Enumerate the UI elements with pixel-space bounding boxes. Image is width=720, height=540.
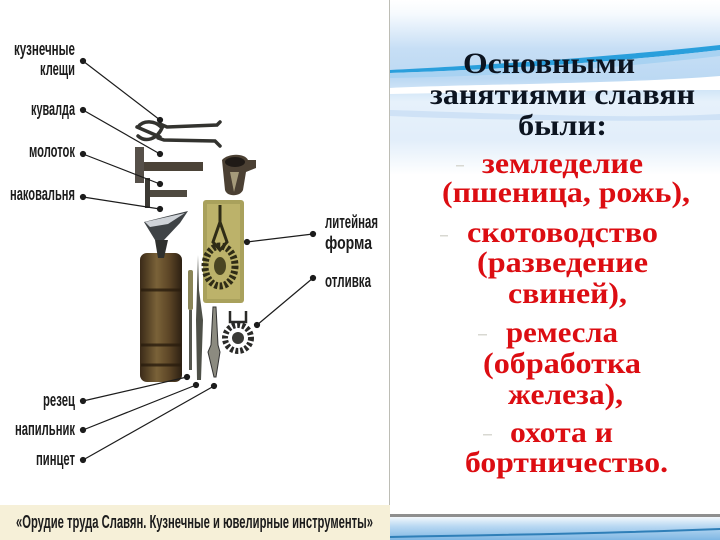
list of occupations: скотоводство [467,216,658,249]
tool labels: молоток [29,141,76,161]
panel: blue sky background [390,0,720,540]
icon: chisel [188,270,193,370]
list of occupations: железа), [508,378,623,411]
icon: sledgehammer [135,147,203,183]
list of occupations: (пшеница, рожь), [442,176,690,209]
icon: crucible [222,155,256,195]
caption band [0,505,390,540]
tool labels: кувалда [31,99,76,119]
list of occupations: (обработка [483,347,641,380]
tool labels: напильник [15,419,76,439]
icon: tweezers [208,307,220,377]
panel: tools illustration [0,0,390,505]
list of occupations: бортничество. [465,446,668,479]
heading: main occupations [430,47,695,142]
caption band: «Орудие труда Славян. Кузнечные и ювелирные инструменты» [16,512,373,532]
icon: anvil on wooden block [140,211,188,382]
tool labels: клещи [40,59,75,79]
heading: main occupations: были: [518,109,607,142]
icon: file [196,255,203,380]
tool labels: наковальня [10,184,75,204]
list of occupations: земледелие [482,147,643,180]
list of occupations: свиней), [508,277,627,310]
leader lines and dots [80,58,316,462]
icon: cast ornament [225,311,251,351]
tool labels: кузнечные [14,39,75,59]
tool labels [10,39,378,469]
tool labels: форма [325,233,373,253]
list of occupations [442,147,690,479]
tool labels: резец [43,390,75,410]
bullet dashes [440,165,492,436]
heading: main occupations: занятиями славян [430,78,695,111]
tool labels: пинцет [36,449,75,469]
icon: blacksmith tongs [137,122,220,146]
icon: casting mould [203,200,244,303]
list of occupations: (разведение [477,246,648,279]
list of occupations: охота и [510,416,613,449]
tool labels: литейная [325,212,378,232]
heading: main occupations: Основными [463,47,635,80]
icon: hammer [145,178,187,208]
tool labels: отливка [325,271,372,291]
list of occupations: ремесла [506,316,618,349]
